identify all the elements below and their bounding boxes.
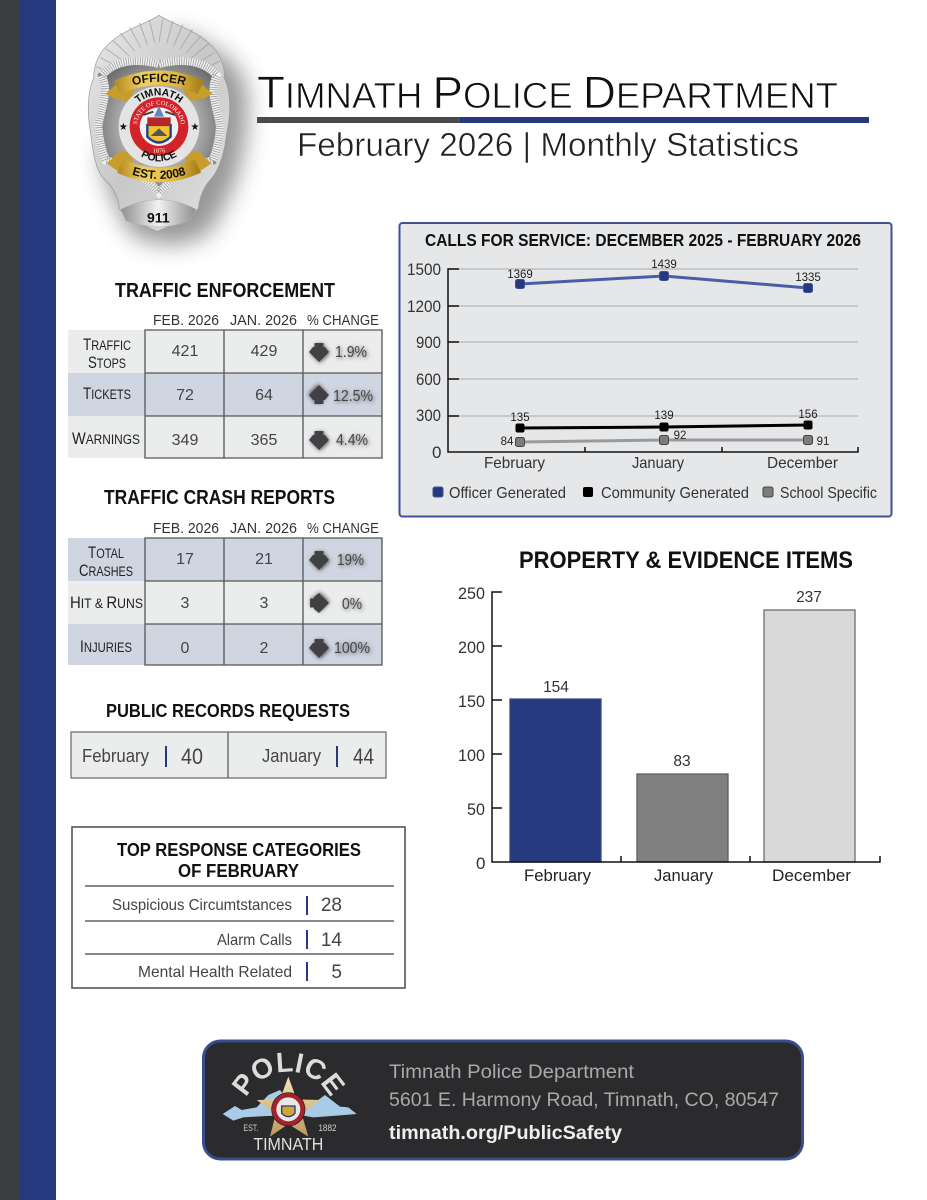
stat box: 40 [181, 744, 203, 769]
y axis labels: 50 [467, 800, 485, 819]
seal: POLICE [141, 150, 177, 162]
row: hit and runs [70, 593, 362, 613]
heading: TRAFFIC ENFORCEMENT [115, 280, 335, 302]
row: traffic stops: STOPS [88, 354, 126, 372]
category labels [524, 866, 851, 885]
category rows [112, 895, 342, 983]
table backgrounds [68, 330, 382, 458]
icon: officer badge [88, 15, 263, 260]
row: traffic stops: 421 [172, 343, 198, 360]
category labels: January [654, 866, 713, 885]
seal: ★ [119, 122, 128, 133]
row: warnings: 4.4% [336, 432, 368, 449]
bottom banner [106, 150, 212, 182]
row: warnings: WARNINGS [72, 430, 140, 448]
y axis labels: 150 [458, 692, 485, 711]
x axis labels: January [632, 455, 684, 472]
row: warnings: 365 [251, 432, 277, 449]
value labels [543, 589, 822, 770]
y axis labels: 900 [416, 333, 441, 352]
category labels: February [524, 866, 591, 885]
row: traffic stops: 429 [251, 343, 277, 360]
row: hit and runs: 0% [342, 596, 362, 613]
category rows: 5 [331, 962, 342, 983]
series: school specific: 91 [817, 436, 829, 448]
series: officer generated: 1439 [651, 259, 677, 271]
value labels: 154 [543, 679, 569, 696]
axes [448, 269, 858, 452]
row: tickets [83, 385, 373, 405]
table grid [145, 330, 382, 458]
row: injuries: 0 [181, 640, 190, 657]
row: total crashes: 19% [337, 552, 364, 569]
heading: TRAFFIC CRASH REPORTS [104, 487, 335, 509]
panel: public records requests [71, 701, 386, 778]
y axis labels [407, 260, 441, 462]
legend: School Specific [780, 485, 877, 502]
heading [117, 839, 361, 881]
icon: timnath police logo: POLICE [232, 1052, 346, 1096]
row: tickets: 12.5% [333, 388, 373, 405]
table grid [145, 538, 382, 665]
row: injuries: INJURIES [80, 638, 132, 656]
title: TIMNATH POLICE DEPARTMENT [257, 67, 838, 118]
series: community generated: 139 [654, 410, 674, 422]
category rows: Suspicious Circumtstances [112, 897, 292, 914]
seal [118, 86, 200, 168]
stat box: February [82, 746, 149, 766]
column headers: % CHANGE [307, 312, 379, 329]
row: tickets: 72 [176, 387, 194, 404]
911 tab [121, 200, 196, 227]
row: warnings [72, 430, 368, 450]
heading: OF FEBRUARY [178, 860, 300, 881]
y axis labels: 0 [432, 443, 441, 462]
icon: timnath police logo: EST. [243, 1123, 258, 1133]
y axis labels [458, 584, 485, 873]
value labels: 83 [673, 753, 691, 770]
row: hit and runs: 3 [260, 595, 269, 612]
series: school specific: 92 [674, 430, 686, 442]
stat box: 44 [353, 744, 374, 769]
heading: PUBLIC RECORDS REQUESTS [106, 701, 350, 721]
y axis labels: 1500 [407, 260, 441, 279]
legend [433, 485, 877, 502]
row: traffic stops: 1.9% [335, 344, 367, 361]
row: hit and runs: 3 [181, 595, 190, 612]
footer panel [202, 1040, 804, 1160]
column headers: JAN. 2026 [230, 520, 297, 537]
row: total crashes: 21 [255, 551, 273, 568]
column headers: FEB. 2026 [153, 520, 219, 537]
chart title: CALLS FOR SERVICE: DECEMBER 2025 - FEBRUARY 2026 [425, 230, 861, 250]
seal: TIMNATH [134, 88, 184, 103]
panel: top response categories [72, 827, 405, 988]
series: officer generated: 1369 [507, 269, 533, 281]
heading: TOP RESPONSE CATEGORIES [117, 839, 361, 860]
legend: Community Generated [601, 485, 749, 502]
y axis labels: 0 [476, 854, 485, 873]
series: officer generated [507, 259, 821, 292]
series: school specific: 84 [501, 436, 514, 448]
row: injuries: 100% [334, 640, 370, 657]
911 tab: 911 [147, 210, 170, 226]
row: total crashes: CRASHES [79, 562, 133, 580]
y axis labels: 100 [458, 746, 485, 765]
row: tickets: TICKETS [83, 385, 131, 403]
series: community generated [510, 409, 818, 432]
top banner: OFFICER [132, 74, 186, 86]
seal: ★ [191, 122, 200, 133]
chart title: PROPERTY & EVIDENCE ITEMS [519, 547, 853, 574]
contact text: timnath.org/PublicSafety [389, 1123, 622, 1144]
value labels: 237 [796, 589, 822, 606]
row: tickets: 64 [255, 387, 273, 404]
seal: STATE OF COLORADO [133, 100, 185, 124]
y axis labels: 200 [458, 638, 485, 657]
icon: timnath police logo: 1882 [318, 1123, 337, 1133]
y axis labels: 300 [416, 406, 441, 425]
category rows: 14 [321, 930, 342, 951]
row: injuries: 2 [260, 640, 269, 657]
seal: 1876 [153, 148, 165, 155]
stat box: January [262, 746, 321, 766]
column headers: FEB. 2026 [153, 312, 219, 329]
series: community generated: 135 [510, 412, 530, 424]
category rows: Mental Health Related [138, 964, 292, 981]
contact text: Timnath Police Department [389, 1062, 635, 1083]
category rows: 28 [321, 895, 342, 916]
row: total crashes: TOTAL [88, 544, 124, 562]
x axis labels: December [767, 455, 839, 472]
series: community generated: 156 [798, 409, 818, 421]
stat box [71, 732, 386, 778]
series: school specific [501, 430, 829, 448]
subtitle: February 2026 | Monthly Statistics [297, 126, 799, 163]
contact text [389, 1062, 779, 1144]
axes [492, 592, 880, 862]
x axis labels [484, 455, 839, 472]
row: total crashes: 17 [176, 551, 194, 568]
row: hit and runs: HIT & RUNS [70, 594, 143, 612]
column headers: % CHANGE [307, 520, 379, 537]
row: traffic stops [83, 336, 367, 372]
panel: calls for service line chart [400, 223, 892, 516]
series: officer generated: 1335 [795, 272, 821, 284]
category labels: December [772, 866, 851, 885]
y axis labels: 600 [416, 370, 441, 389]
category rows: Alarm Calls [217, 932, 292, 949]
row: warnings: 349 [172, 432, 198, 449]
table backgrounds [68, 538, 382, 665]
panel: traffic enforcement [68, 280, 382, 458]
panel: traffic crash reports [68, 487, 382, 665]
icon: timnath police logo: TIMNATH [253, 1134, 323, 1154]
top banner [105, 70, 212, 101]
y axis labels: 1200 [407, 297, 441, 316]
title underline [257, 117, 869, 123]
column headers: JAN. 2026 [230, 312, 297, 329]
icon: timnath police logo [222, 1052, 356, 1154]
bars [510, 610, 855, 862]
column headers [153, 520, 379, 537]
column headers [153, 312, 379, 329]
contact text: 5601 E. Harmony Road, Timnath, CO, 80547 [389, 1090, 779, 1111]
row: injuries [80, 638, 370, 658]
x axis labels: February [484, 455, 545, 472]
panel: property and evidence bar chart [458, 547, 880, 885]
left side band [0, 0, 56, 1200]
legend: Officer Generated [449, 485, 566, 502]
y axis labels: 250 [458, 584, 485, 603]
row: traffic stops: TRAFFIC [83, 336, 131, 354]
bottom banner: EST. 2008 [132, 166, 186, 179]
row: total crashes [79, 544, 364, 580]
